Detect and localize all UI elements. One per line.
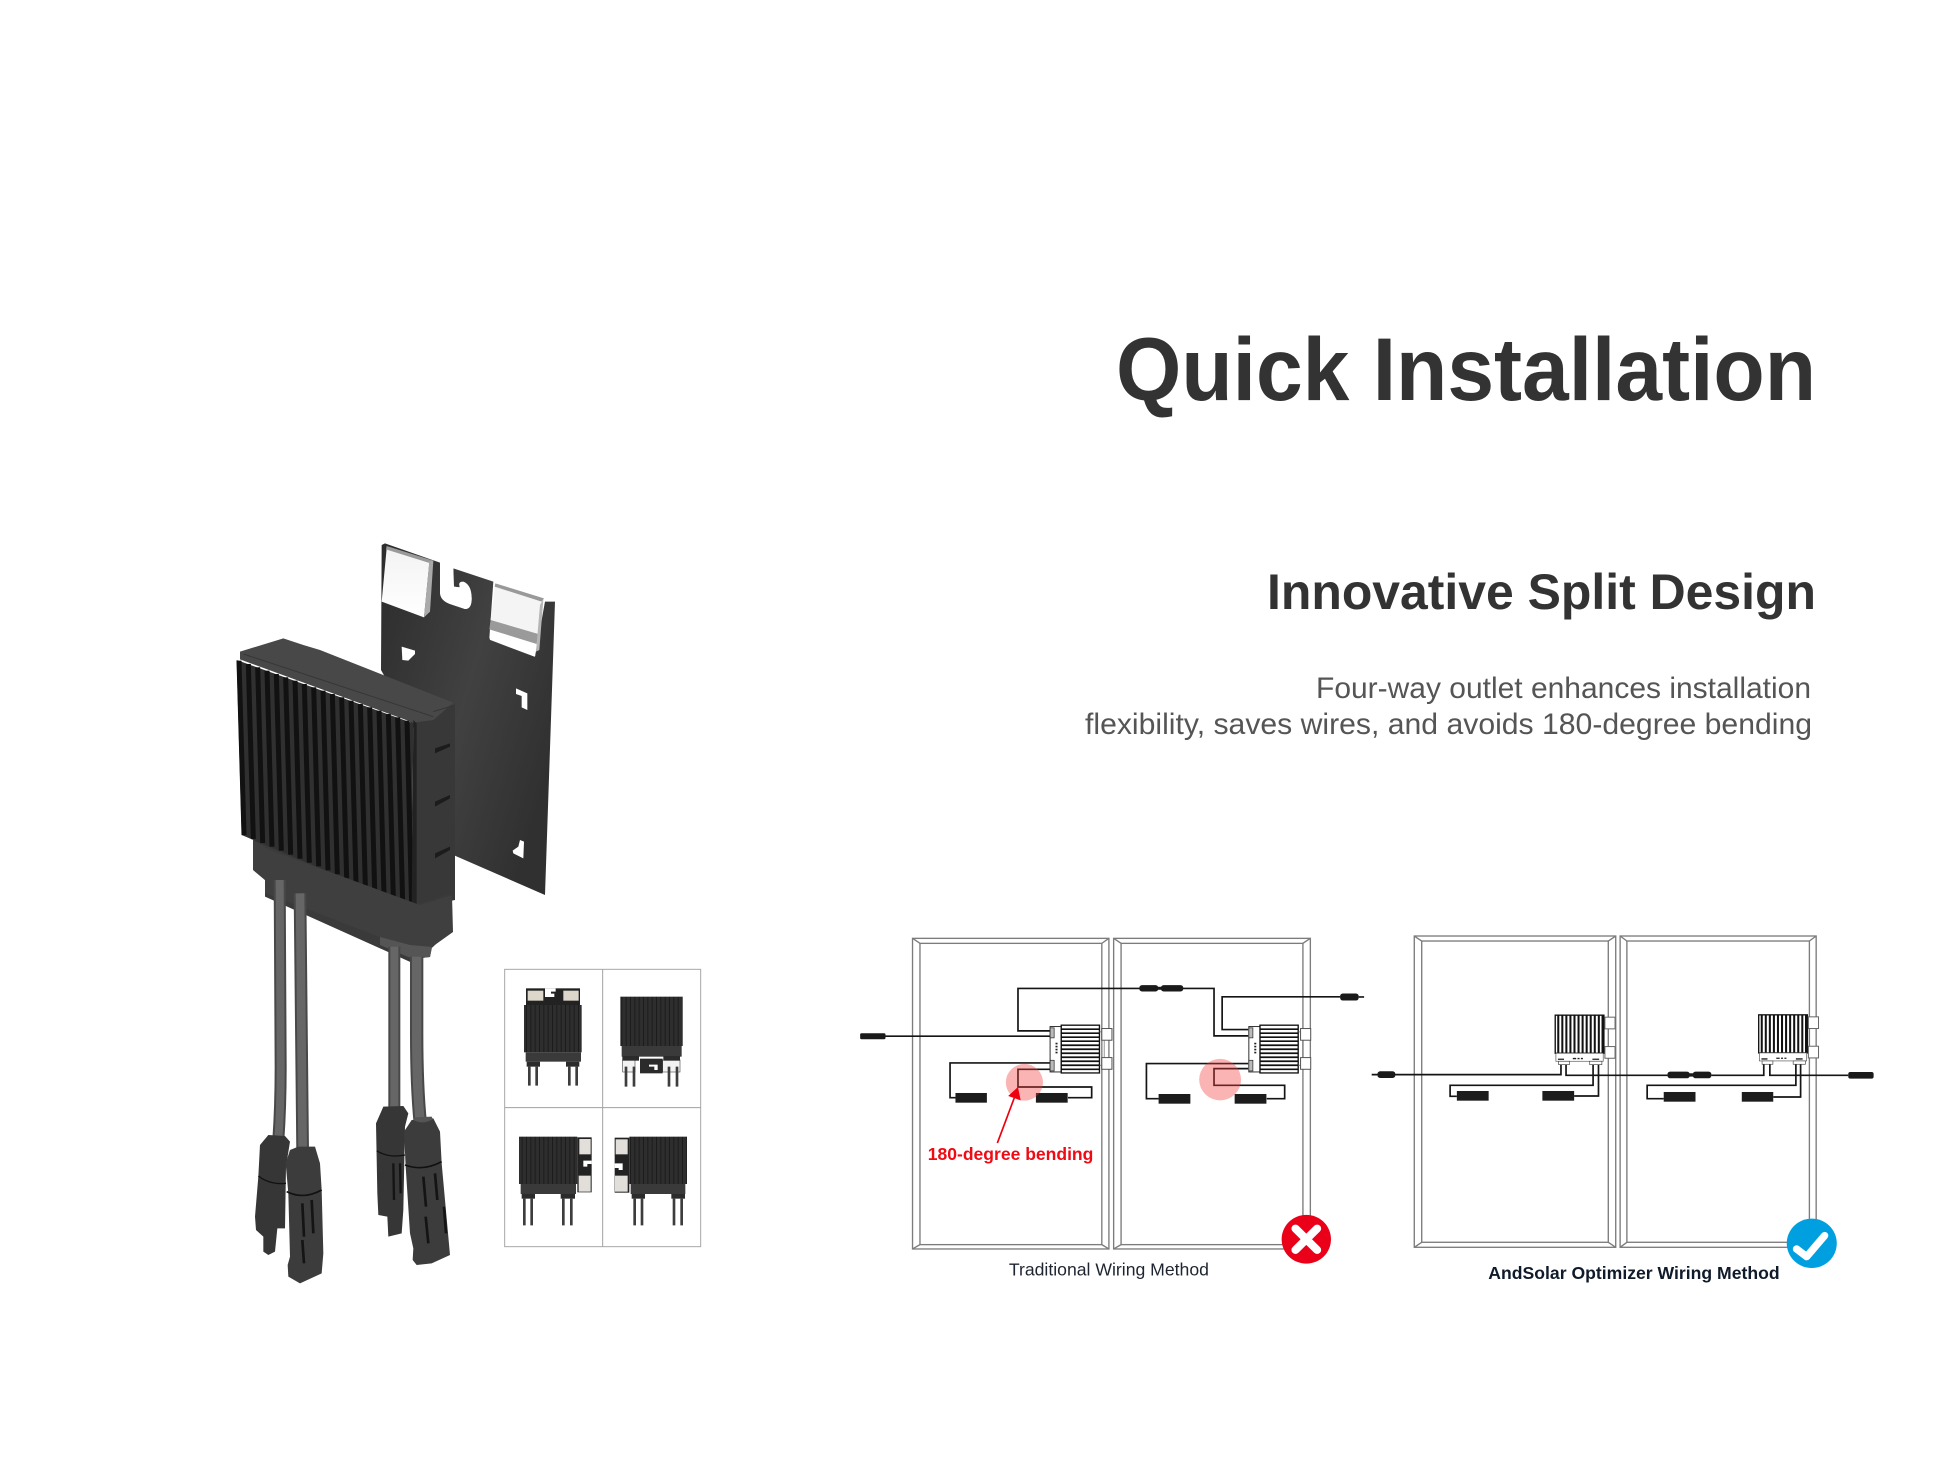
orientation views grid <box>505 969 701 1247</box>
wiring diagram: traditional method <box>860 938 1364 1280</box>
optimizer: left <box>1050 1025 1112 1073</box>
view: plate left <box>615 1137 687 1225</box>
optimizer: left <box>1555 1015 1615 1065</box>
icon: red cross <box>1282 1215 1331 1264</box>
caption: traditional: Traditional Wiring Method <box>1009 1260 1209 1280</box>
title: Quick Installation <box>1116 319 1816 419</box>
product: optimizer with mounting bracket <box>237 543 555 1283</box>
view: plate right <box>519 1137 592 1225</box>
plug connectors <box>860 985 1364 1039</box>
clip: right <box>491 586 543 634</box>
wires <box>1372 1064 1848 1099</box>
MC4 connectors <box>255 1106 450 1283</box>
bypass diode boxes <box>1457 1091 1773 1102</box>
icon: blue check <box>1787 1219 1837 1268</box>
cables <box>278 880 420 1153</box>
solar panel frames <box>913 938 1310 1249</box>
caption: AndSolar: AndSolar Optimizer Wiring Method <box>1488 1263 1780 1283</box>
bend highlight circles <box>1006 1059 1241 1101</box>
red arrow <box>997 1087 1021 1143</box>
description text: Four-way outlet enhances installation <box>1316 672 1811 705</box>
view: top-up <box>524 988 582 1086</box>
clip: left <box>382 548 429 617</box>
description text <box>1085 672 1812 741</box>
bypass diode boxes <box>955 1093 1266 1104</box>
plug connectors <box>1377 1071 1874 1079</box>
solar panel frames <box>1414 936 1816 1247</box>
wires <box>884 988 1340 1099</box>
callout: 180-degree bending: 180-degree bending <box>928 1144 1093 1164</box>
wiring diagram: AndSolar optimizer method <box>1372 936 1874 1283</box>
lower housing <box>253 840 453 959</box>
subtitle: Innovative Split Design <box>1267 564 1816 620</box>
optimizer: right <box>1249 1025 1311 1073</box>
optimizer: right <box>1759 1015 1819 1064</box>
optimizer body <box>237 638 455 963</box>
mounting plate <box>381 543 555 895</box>
description text: flexibility, saves wires, and avoids 180-degree bending <box>1085 708 1812 741</box>
view: bottom-up <box>620 997 683 1087</box>
